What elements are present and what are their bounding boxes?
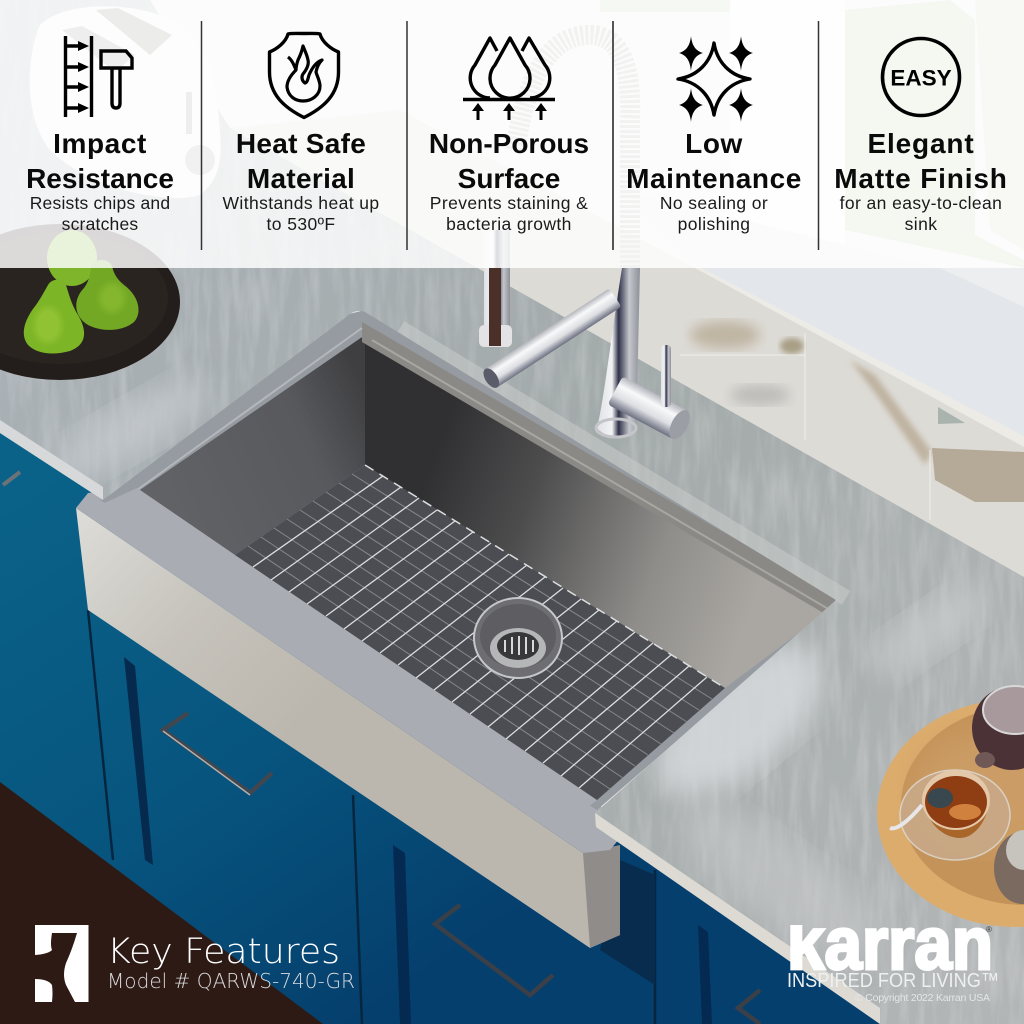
- copyright: © Copyright 2022 Karran USA: [855, 992, 990, 1004]
- icon: shield with flame: [270, 33, 338, 118]
- rim front strip: [100, 488, 597, 830]
- brand mark: [35, 925, 88, 1002]
- description: sink: [905, 214, 937, 234]
- title: key features: [107, 932, 355, 993]
- description: bacteria growth: [446, 214, 572, 234]
- faucet body: [597, 268, 640, 437]
- spray head: [479, 230, 512, 347]
- registered mark: ®: [986, 925, 992, 934]
- spout: [480, 288, 621, 391]
- feature: matte finish: [834, 38, 1008, 234]
- heading: Low: [685, 128, 743, 159]
- heading: Material: [247, 163, 355, 194]
- feature: heat safe: [222, 33, 380, 234]
- wordmark: karran: [787, 902, 993, 985]
- icon: easy badge: EASY: [890, 66, 952, 90]
- farmhouse sink apron: [76, 508, 620, 948]
- cabinet handles: [3, 472, 760, 1024]
- plate with pears: [0, 224, 180, 380]
- icon: sparkles: [678, 36, 753, 122]
- icon: wall and hammer: [66, 36, 132, 117]
- basin left wall: [140, 335, 365, 555]
- heading: Non-Porous: [429, 128, 589, 159]
- wire grid on floor: [235, 465, 725, 800]
- pear right: [76, 260, 139, 330]
- karran logo: [788, 925, 998, 1003]
- saucer: [900, 770, 1010, 860]
- basin moulded lip: [362, 322, 840, 618]
- wooden tray with tea set: [877, 686, 1024, 927]
- heading: Surface: [458, 163, 560, 194]
- description: No sealing or: [660, 193, 768, 213]
- faucet handle: [608, 345, 694, 442]
- description: polishing: [678, 214, 750, 234]
- heading: Resistance: [26, 163, 174, 194]
- drain: [474, 598, 562, 678]
- pear left: [24, 280, 84, 353]
- cabinets: [0, 425, 900, 1024]
- description: to 530ºF: [267, 214, 335, 234]
- sink rim: [76, 488, 620, 853]
- glass jar: [994, 830, 1024, 904]
- wood floor: [0, 782, 323, 1024]
- tagline: INSPIRED FOR LIVING™: [787, 969, 999, 992]
- teapot: [972, 686, 1024, 770]
- toaster: [30, 6, 221, 198]
- description: Prevents staining &: [430, 193, 588, 213]
- window sill: [620, 190, 1024, 456]
- heading: Matte Finish: [834, 163, 1008, 194]
- feature: non-porous: [429, 38, 589, 234]
- dividers: [202, 21, 818, 250]
- spoon: [890, 805, 922, 828]
- counter front edges: [0, 420, 103, 500]
- sink basin: [100, 310, 840, 830]
- marble backsplash tiles: [230, 110, 1024, 577]
- feature: low maintenance: [626, 36, 802, 234]
- heading: Impact: [53, 128, 147, 159]
- heading: Key Features: [107, 932, 340, 972]
- tea cup: [922, 770, 990, 838]
- heading: Heat Safe: [236, 128, 366, 159]
- basin back wall: [365, 335, 836, 688]
- heading: Elegant: [867, 128, 975, 159]
- spring hose: [515, 35, 630, 268]
- icon: easy badge: [882, 38, 960, 116]
- model number: Model # QARWS-740-GR: [107, 969, 355, 993]
- description: Withstands heat up: [222, 193, 380, 213]
- description: Resists chips and: [30, 193, 170, 213]
- icon: drops on surface: [463, 38, 555, 120]
- description: for an easy-to-clean: [840, 193, 1002, 213]
- description: scratches: [62, 214, 138, 234]
- faucet: [479, 35, 694, 442]
- top feature band: [0, 0, 1024, 268]
- feature: impact resistance: [26, 36, 174, 234]
- heading: Maintenance: [626, 163, 802, 194]
